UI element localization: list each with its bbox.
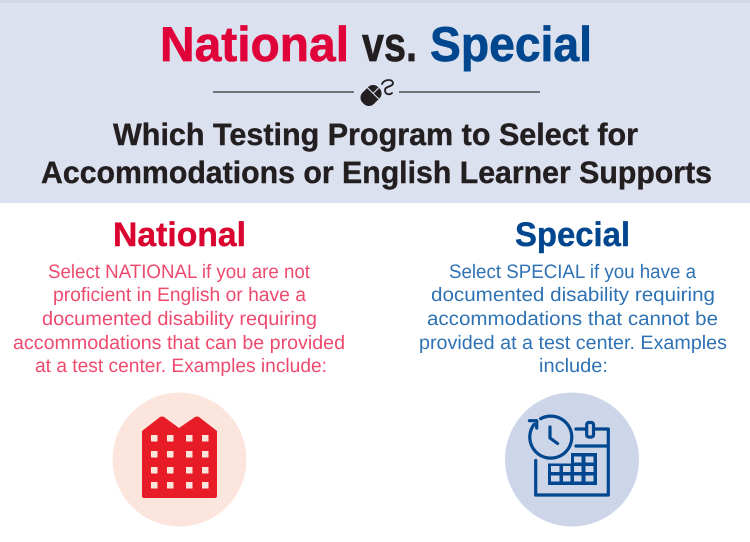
title: National <box>160 18 349 72</box>
text block: special description: provided at a test center. Examples <box>419 332 727 354</box>
text block: national description: at a test center. Examples include: <box>35 355 327 377</box>
icon: calendar with clock <box>505 392 639 526</box>
title: vs. <box>362 18 417 72</box>
text block: national description: proficient in English or have a <box>53 284 306 306</box>
text block: special description: Select SPECIAL if you have a <box>449 261 696 283</box>
text block: national description: accommodations that can be provided <box>13 332 345 354</box>
divider with mouse icon <box>213 80 540 109</box>
text block: national description: documented disability requiring <box>42 308 317 330</box>
icon: building <box>112 392 246 526</box>
text block: national description: Select NATIONAL if you are not <box>48 261 311 283</box>
text block: national description <box>13 261 345 377</box>
subtitle <box>41 117 712 190</box>
panel: special <box>419 216 727 526</box>
heading: national: National <box>113 216 246 254</box>
text block: special description: documented disability requiring <box>431 284 715 306</box>
subtitle: Accommodations or English Learner Supports <box>41 155 712 190</box>
text block: special description: include: <box>539 355 608 377</box>
text block: special description: accommodations that cannot be <box>427 308 718 330</box>
title: Special <box>430 18 592 72</box>
panel: national <box>13 216 345 526</box>
title <box>160 18 592 72</box>
text block: special description <box>419 261 727 377</box>
heading: special: Special <box>515 216 630 254</box>
header band <box>0 0 750 203</box>
subtitle: Which Testing Program to Select for <box>113 117 638 152</box>
